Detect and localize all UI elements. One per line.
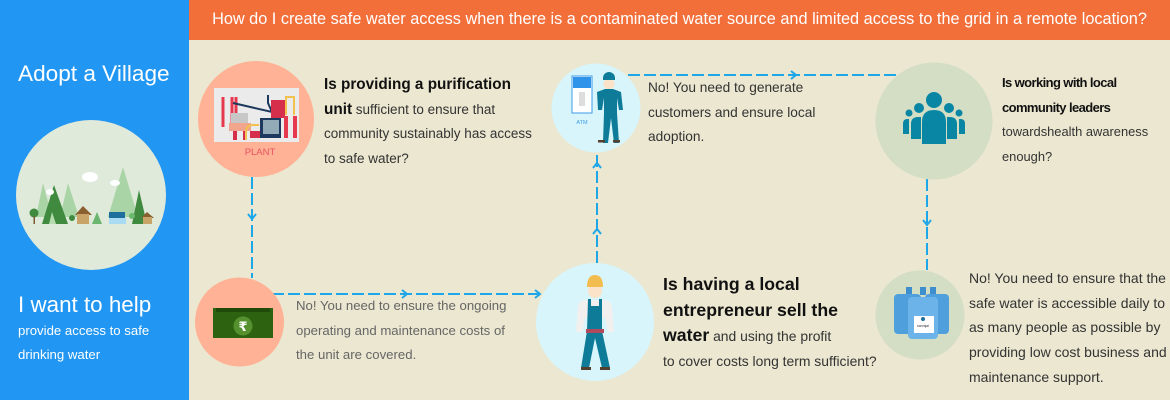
- icon: entrepreneur: [536, 263, 654, 381]
- text: ongoing costs: No! You need to ensure the ongoing: [296, 298, 506, 313]
- icon: ATM and technician: [552, 64, 640, 152]
- text: community leaders question: towardshealth awareness: [1002, 124, 1148, 139]
- connector lines: [248, 71, 931, 298]
- text: community leaders question: Is working with local: [1002, 75, 1117, 90]
- icon: plant: [198, 61, 314, 177]
- text: local entrepreneur question: water and using the profit: [663, 325, 831, 345]
- icon: money note: [195, 278, 284, 366]
- text: generate customers: customers and ensure local: [648, 105, 815, 120]
- text: generate customers: [648, 80, 815, 144]
- icon: water bottles: [876, 270, 964, 360]
- text: low cost support: No! You need to ensure that the: [969, 270, 1166, 286]
- header banner: How do I create safe water access when there is a contaminated water source and limited access to the grid in a remote location?: [212, 10, 1147, 28]
- text: purification question: unit sufficient to ensure that: [324, 101, 495, 118]
- sidebar text: [18, 323, 149, 362]
- header banner: [189, 0, 1170, 40]
- icon: ATM and technician: ATM: [576, 120, 588, 126]
- text: local entrepreneur question: [663, 274, 877, 369]
- icon: money note: ₹: [238, 320, 248, 335]
- icon: community leaders: [876, 62, 992, 180]
- sidebar: [0, 0, 189, 400]
- text: low cost support: providing low cost business and: [969, 344, 1167, 360]
- label: PLANT: PLANT: [245, 147, 276, 158]
- text: purification question: Is providing a purification: [324, 76, 511, 93]
- sidebar heading: Adopt a Village: Adopt a Village: [18, 61, 170, 86]
- text: ongoing costs: operating and maintenance costs of: [296, 323, 505, 338]
- text: low cost support: [969, 270, 1167, 385]
- sidebar text: provide access to safe: [18, 323, 149, 338]
- text: local entrepreneur question: entrepreneur sell the: [663, 300, 838, 320]
- text: community leaders question: [1002, 75, 1148, 164]
- text: generate customers: No! You need to generate: [648, 80, 803, 95]
- icon: village: [16, 120, 166, 270]
- text: local entrepreneur question: Is having a local: [663, 274, 800, 294]
- text: ongoing costs: the unit are covered.: [296, 347, 416, 362]
- text: purification question: community sustainably has access: [324, 126, 532, 141]
- text: purification question: to safe water?: [324, 151, 409, 166]
- text: low cost support: safe water is accessible daily to: [969, 295, 1165, 311]
- text: community leaders question: enough?: [1002, 149, 1052, 164]
- text: generate customers: adoption.: [648, 129, 704, 144]
- text: low cost support: maintenance support.: [969, 369, 1104, 385]
- icon: water bottles: sarvajal: [917, 324, 929, 328]
- text: ongoing costs: [296, 298, 506, 362]
- sidebar text: drinking water: [18, 347, 100, 362]
- text: low cost support: as many people as possible by: [969, 319, 1160, 335]
- text: purification question: [324, 76, 532, 166]
- text: community leaders question: community leaders: [1002, 100, 1110, 115]
- text: local entrepreneur question: to cover costs long term sufficient?: [663, 353, 877, 369]
- sidebar subheading: I want to help: I want to help: [18, 292, 151, 317]
